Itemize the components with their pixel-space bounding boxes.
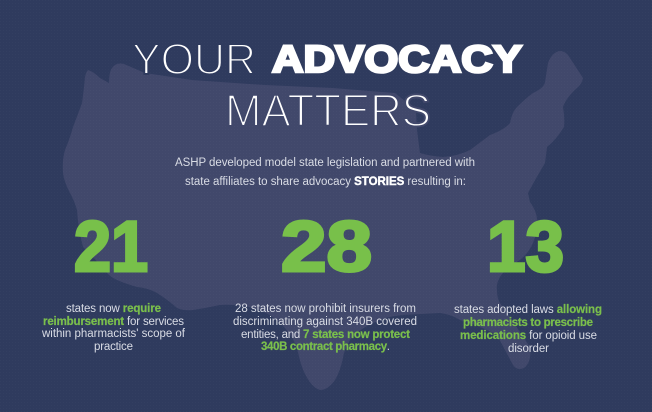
intro text: ASHP developed model state legislation and partnered with — [175, 157, 475, 169]
title word: YOUR: YOUR — [132, 35, 256, 84]
stat column: 13 — [454, 208, 602, 355]
description 21 — [41, 303, 186, 353]
description 21: practice — [94, 341, 133, 353]
title — [132, 35, 522, 136]
description 13: states adopted laws allowing — [454, 304, 602, 316]
title word: MATTERS: MATTERS — [225, 85, 431, 136]
description 28: entities, and 7 states now protect — [241, 329, 410, 341]
title word: ADVOCACY: ADVOCACY — [272, 39, 522, 81]
description 21: within pharmacists' scope of — [41, 328, 186, 340]
number 28: 28 — [281, 208, 372, 287]
number 21: 21 — [74, 208, 148, 287]
description 28: discriminating against 340B covered — [233, 316, 417, 328]
description 13: medications for opioid use — [460, 330, 597, 342]
intro text — [175, 157, 475, 188]
description 28: 28 states now prohibit insurers from — [235, 303, 416, 315]
description 21: reimbursement for services — [43, 316, 184, 328]
stat column: 28 — [233, 208, 417, 353]
description 13: disorder — [508, 343, 549, 355]
map of the United States — [63, 51, 583, 390]
description 28 — [233, 303, 417, 353]
description 13: pharmacists to prescribe — [463, 317, 593, 329]
intro text: state affiliates to share advocacy STORIES resulting in: — [185, 176, 466, 188]
stat column: 21 — [41, 208, 186, 353]
number 13: 13 — [487, 208, 564, 287]
description 28: 340B contract pharmacy. — [261, 341, 390, 353]
description 21: states now require — [66, 303, 161, 315]
description 13 — [454, 304, 602, 355]
